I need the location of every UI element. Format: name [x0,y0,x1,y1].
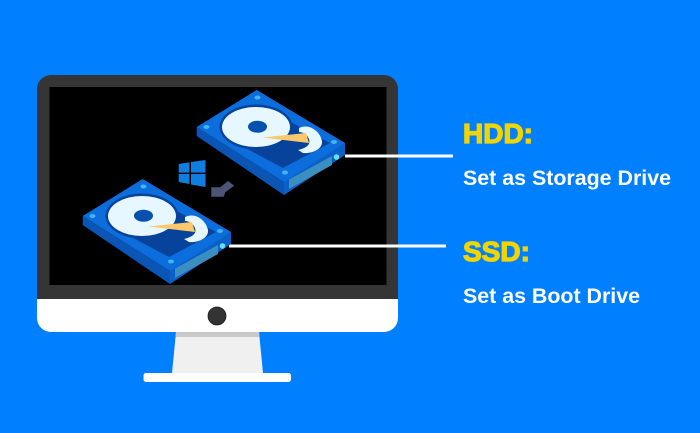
monitor [37,75,398,382]
monitor stand [172,332,263,373]
power button [208,307,226,325]
drive icon: HDD [197,90,345,195]
heading: HDD: HDD: [463,118,533,149]
screen [50,87,386,285]
description: HDD: Set as Storage Drive [463,166,671,190]
drive icon: SSD [83,179,231,284]
heading: SSD: SSD: [463,236,530,267]
label: HDD [463,118,671,190]
icon: windows logo [179,160,206,187]
monitor chin [37,298,398,332]
monitor bezel [37,75,398,299]
description: SSD: Set as Boot Drive [463,284,640,308]
connector line: HDD [345,154,453,158]
connector line: SSD [229,244,446,248]
label: SSD [463,236,640,308]
monitor base [144,373,291,382]
icon: arrow [211,181,234,197]
